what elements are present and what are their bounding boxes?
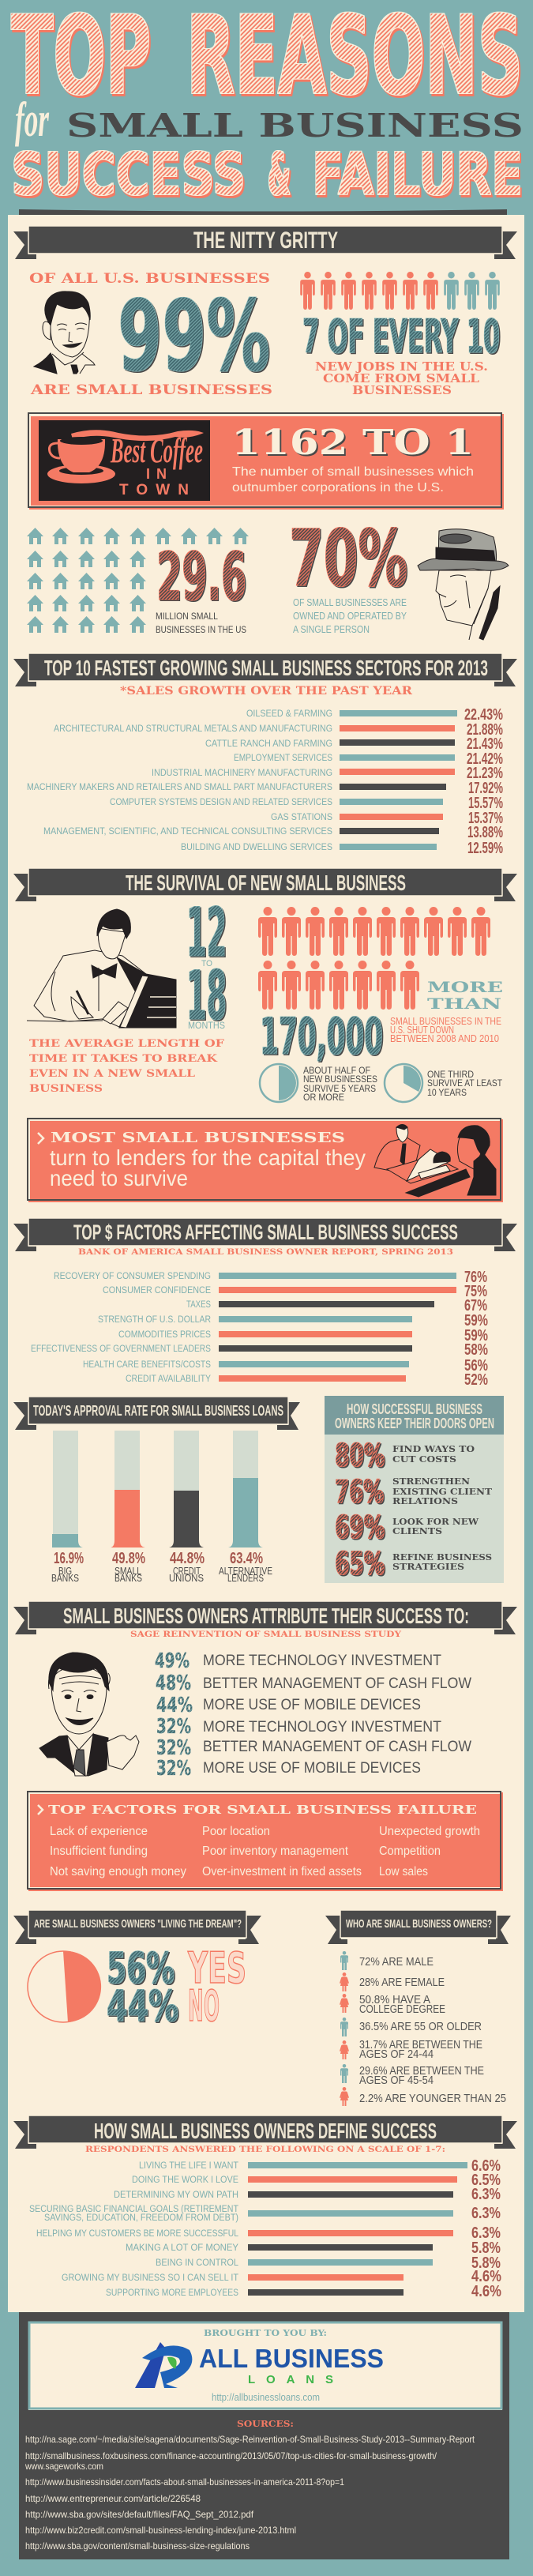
row: building and dwelling [181, 840, 503, 857]
row: sell it: GROWING MY BUSINESS SO I CAN SELL IT [62, 2273, 238, 2283]
row: strength of dollar [98, 1312, 488, 1329]
stat: 70 percent single owner [289, 513, 509, 640]
row: own path: 6.3% [471, 2186, 501, 2203]
row: oilseed and farming: 22.43% [464, 706, 503, 724]
row: 49 percent: 49% [155, 1649, 190, 1673]
row: college degree [340, 1994, 445, 2016]
row: taxes: TAXES [186, 1300, 211, 1310]
stat: 65 percent [335, 1546, 492, 1582]
row: ages 45-54: AGES OF 45-54 [359, 2074, 434, 2087]
banner: approval rate: TODAY'S APPROVAL RATE FOR SMALL BUSINESS LOANS [33, 1403, 283, 1419]
row: cattle ranch: CATTLE RANCH AND FARMING [205, 739, 332, 749]
stat: 65 percent: 65% [335, 1546, 385, 1582]
row: living the life: LIVING THE LIFE I WANT [139, 2161, 238, 2171]
stat: 65 percent: REFINE BUSINESS [392, 1551, 492, 1563]
failure factors list: Poor location [202, 1825, 270, 1838]
row: credit availability: CREDIT AVAILABILITY [126, 1374, 211, 1384]
sign: best coffee in town: Best Coffee [110, 431, 203, 470]
banner: approval rate [13, 1397, 300, 1430]
chart: living the dream [28, 1943, 246, 2031]
row: 55 or older [340, 2018, 482, 2036]
caption: half survive [303, 1065, 377, 1103]
row: sell it: 4.6% [471, 2268, 501, 2285]
words: more than [427, 979, 503, 1013]
row: 44 percent [156, 1694, 421, 1717]
illustration: man writing at desk [27, 909, 176, 1028]
row: industrial machinery [152, 765, 503, 782]
big text: 1162 to 1: 1162 TO 1 [231, 423, 474, 463]
value: 56 percent: 56% [107, 1943, 175, 1993]
caption: new jobs: COME FROM SMALL [323, 371, 479, 385]
caption: shut down: SMALL BUSINESSES IN THE [390, 1016, 501, 1027]
row: building and dwelling: BUILDING AND DWELLING SERVICES [181, 843, 332, 852]
source list: http://www.sba.gov/sites/default/files/FAQ_Sept_2012.pdf [25, 2509, 254, 2520]
title [11, 0, 524, 209]
row: 49 percent [155, 1649, 441, 1673]
illustration: man in hat [418, 529, 509, 640]
caption: owned and operated [293, 597, 407, 635]
column: alternative lenders: ALTERNATIVE [219, 1566, 272, 1577]
banner: top factors [13, 1218, 517, 1251]
stat: 69 percent: CLIENTS [392, 1525, 442, 1536]
row: living the life: 6.6% [471, 2157, 501, 2175]
caption: owned and operated: OF SMALL BUSINESSES ARE [293, 597, 407, 608]
row: money: MAKING A LOT OF MONEY [126, 2243, 238, 2253]
sign: best coffee in town: TOWN [119, 482, 189, 498]
banner: attribute their success [13, 1601, 517, 1634]
row: consumer spending: RECOVERY OF CONSUMER SPENDING [54, 1272, 211, 1281]
failure factors list [50, 1825, 480, 1878]
sign: best coffee in town: IN [146, 466, 167, 482]
row: 32 percent mobile: 32% [156, 1757, 191, 1781]
row: doing the work: DOING THE WORK I LOVE [132, 2175, 238, 2185]
logo: all business loans [135, 2342, 384, 2388]
row: consumer confidence: 75% [464, 1283, 487, 1300]
logo: all business loans: LOANS [248, 2373, 333, 2386]
row: 48 percent [156, 1672, 472, 1695]
column: credit unions: UNIONS [169, 1573, 204, 1584]
stat: 76 percent: EXISTING CLIENT [392, 1486, 492, 1497]
title line: top reasons [11, 0, 523, 119]
pie chart: one third survive 10 years [385, 1064, 422, 1102]
row: management consulting [43, 824, 503, 841]
row: employees: SUPPORTING MORE EMPLOYEES [106, 2288, 238, 2298]
source list: www.sageworks.com [24, 2461, 103, 2472]
row: male [340, 1951, 434, 1970]
text: 18 [186, 957, 227, 1036]
caption: million small businesses [156, 612, 246, 635]
row: 32 percent technology [156, 1715, 441, 1739]
row: employees: 4.6% [471, 2283, 501, 2300]
row: ages 24-44 [340, 2039, 482, 2061]
callout text: turn to lenders for the capital they [50, 1145, 366, 1170]
row: oilseed and farming [246, 706, 503, 724]
caption: owned and operated: OWNED AND OPERATED BY [293, 611, 407, 622]
title line: success and failure [11, 141, 523, 209]
row: 32 percent technology: 32% [156, 1715, 191, 1739]
row: gas stations [271, 810, 503, 827]
callout: top factors for failure [28, 1792, 503, 1891]
banner: living the dream [13, 1910, 261, 1944]
column: big banks: BANKS [51, 1573, 79, 1584]
pictogram: seventeen people [258, 907, 490, 1010]
row: ages 24-44: 31.7% ARE BETWEEN THE [359, 2039, 482, 2051]
big number: 99 percent: 99% [118, 280, 270, 393]
source list: http://na.sage.com/~/media/site/sagena/documents/Sage-Reinvention-of-Small-Business-Study-2013--Summary-Report [25, 2434, 475, 2445]
row: doing the work: 6.5% [471, 2172, 501, 2189]
callout frame [28, 1119, 503, 1202]
column: small banks: 49.8% [112, 1550, 145, 1567]
callout frame [28, 1792, 503, 1891]
row: consumer spending: 76% [464, 1269, 487, 1286]
row: gas stations: GAS STATIONS [271, 813, 332, 822]
stat: 80 percent [335, 1438, 475, 1474]
callout heading: MOST SMALL BUSINESSES [51, 1130, 345, 1146]
row: computer systems: COMPUTER SYSTEMS DESIGN AND RELATED SERVICES [110, 798, 332, 807]
caption: half survive: ABOUT HALF OF [303, 1065, 370, 1076]
callout: most small businesses [28, 1119, 503, 1202]
callout text: need to survive [50, 1166, 188, 1190]
row: 32 percent cash flow: BETTER MANAGEMENT OF CASH FLOW [203, 1738, 472, 1755]
callout description: The number of small businesses which [232, 465, 474, 479]
row: government leaders: EFFECTIVENESS OF GOVERNMENT LEADERS [31, 1344, 211, 1354]
label: yes: YES [187, 1943, 246, 1993]
column: credit unions: 44.8% [170, 1550, 205, 1567]
value: 44 percent: 44% [107, 1981, 178, 2031]
row: computer systems [110, 795, 503, 812]
failure factors list: Unexpected growth [379, 1825, 480, 1838]
script word: for: for [15, 93, 49, 147]
title line: success and failure: SUCCESS [11, 141, 246, 209]
sign: best coffee in town [39, 420, 210, 501]
source list: http://www.entrepreneur.com/article/226548 [25, 2493, 201, 2504]
stat: 76 percent: STRENGTHEN [392, 1476, 471, 1487]
row: female: 28% ARE FEMALE [359, 1976, 445, 1989]
row: younger than 25 [340, 2087, 506, 2106]
row: 44 percent: 44% [156, 1694, 193, 1717]
row: helping customers: HELPING MY CUSTOMERS BE MORE SUCCESSFUL [36, 2229, 239, 2239]
source list: http://www.businessinsider.com/facts-about-small-businesses-in-america-2011-8?op=1 [25, 2476, 344, 2488]
row: management consulting: MANAGEMENT, SCIENTIFIC, AND TECHNICAL CONSULTING SERVICES [43, 827, 332, 837]
row: credit availability [126, 1371, 488, 1389]
column: credit unions [169, 1431, 205, 1584]
row: ages 45-54: 29.6% ARE BETWEEN THE [359, 2065, 484, 2078]
column chart: approval rates [51, 1431, 272, 1584]
row: 48 percent: 48% [156, 1672, 191, 1695]
pie chart: 56 percent yes [28, 1951, 101, 2022]
column: small banks: BANKS [114, 1573, 142, 1584]
failure factors list: Lack of experience [50, 1825, 148, 1838]
row: computer systems: 15.57% [468, 795, 503, 812]
row: health care [83, 1357, 488, 1374]
callout frame [28, 413, 504, 510]
subheading: sales growth: *SALES GROWTH OVER THE PAST YEAR [120, 685, 412, 698]
stat: more than 170,000 shut down [258, 907, 503, 1103]
big number: 70 percent: 70% [289, 513, 407, 604]
failure factors list: Poor inventory management [202, 1845, 349, 1858]
row: male: 72% ARE MALE [359, 1956, 434, 1969]
stat: 69 percent: 69% [335, 1510, 385, 1546]
bar chart: fastest growing sectors [27, 706, 503, 857]
callout description [232, 465, 474, 495]
bar chart: top factors [31, 1269, 488, 1389]
row: government leaders: 58% [464, 1341, 488, 1359]
stat: break even time [27, 893, 227, 1095]
illustration: man giving thumbs up [39, 1653, 139, 1776]
pie chart: half survive 5 years [260, 1064, 298, 1102]
column: small banks [111, 1431, 145, 1584]
callout text [50, 1145, 366, 1190]
stat: 7 of every 10 new jobs [300, 272, 500, 397]
source list: http://www.sba.gov/content/small-business-size-regulations [25, 2540, 250, 2552]
failure factors list: Insufficient funding [50, 1845, 148, 1858]
caption: one third survive [427, 1069, 503, 1098]
row: helping customers: 6.3% [471, 2224, 501, 2242]
banner: survival of new small business [13, 868, 517, 901]
row: money: 5.8% [471, 2239, 501, 2257]
caption: half survive: SURVIVE 5 YEARS [303, 1083, 376, 1094]
row: consumer spending [54, 1269, 487, 1286]
row: oilseed and farming: OILSEED & FARMING [246, 709, 332, 719]
row: own path [114, 2186, 501, 2203]
row: employment services: EMPLOYMENT SERVICES [234, 754, 332, 763]
row: living the life [139, 2157, 501, 2175]
row: ages 45-54 [340, 2064, 484, 2087]
callout heading: TOP FACTORS FOR SMALL BUSINESS FAILURE [48, 1803, 477, 1817]
row: health care: 56% [464, 1357, 488, 1374]
caption: owned and operated: A SINGLE PERSON [293, 624, 370, 635]
panel: footer [19, 2312, 509, 2559]
big number: 170,000: 170,000 [260, 1008, 383, 1066]
row: 55 or older: 36.5% ARE 55 OR OLDER [359, 2021, 482, 2033]
banner: who are small business owners [325, 1910, 511, 1944]
column: big banks [51, 1431, 84, 1584]
row: 32 percent cash flow [156, 1736, 472, 1760]
title line: success and failure: & [268, 141, 291, 209]
list: who are small business owners [340, 1951, 506, 2106]
row: younger than 25: 2.2% ARE YOUNGER THAN 25 [359, 2093, 506, 2105]
word: months: MONTHS [188, 1020, 225, 1031]
row: 32 percent cash flow: 32% [156, 1736, 191, 1760]
row: strength of dollar: 59% [464, 1312, 488, 1329]
row: machinery makers: MACHINERY MAKERS AND RETAILERS AND SMALL PART MANUFACTURERS [27, 783, 332, 792]
row: taxes [186, 1297, 487, 1314]
row: financial goals: SAVINGS, EDUCATION, FREEDOM FROM DEBT) [44, 2213, 238, 2223]
stat: 80 percent: FIND WAYS TO [392, 1443, 475, 1454]
row: financial goals: SECURING BASIC FINANCIAL GOALS (RETIREMENT [29, 2205, 238, 2214]
row: ages 24-44: AGES OF 24-44 [359, 2048, 434, 2061]
stat: 76 percent: RELATIONS [392, 1495, 458, 1506]
panel body [325, 1435, 504, 1583]
banner: how owners define success [13, 2115, 517, 2149]
caption: new jobs: BUSINESSES [352, 383, 452, 397]
row: helping customers [36, 2224, 501, 2242]
stat: 69 percent [335, 1510, 479, 1546]
row: 48 percent: BETTER MANAGEMENT OF CASH FLOW [203, 1675, 472, 1692]
column: alternative lenders [219, 1431, 272, 1584]
stat: 99 percent of businesses [29, 271, 272, 398]
banner: the nitty gritty: THE NITTY GRITTY [193, 228, 338, 254]
link: website: http://allbusinessloans.com [212, 2392, 320, 2403]
row: college degree: 50.8% HAVE A [359, 1994, 430, 2006]
row: own path: DETERMINING MY OWN PATH [114, 2191, 238, 2200]
column: credit unions: CREDIT [173, 1566, 201, 1577]
row: 44 percent: MORE USE OF MOBILE DEVICES [203, 1696, 421, 1713]
row: cattle ranch: 21.43% [467, 735, 503, 753]
row: architectural metals: 21.88% [467, 721, 503, 739]
banner: living the dream: ARE SMALL BUSINESS OWNERS "LIVING THE DREAM"? [34, 1917, 242, 1931]
caption: million small businesses: BUSINESSES IN THE US [156, 626, 246, 635]
brought to you by box [28, 2322, 502, 2410]
row: taxes: 67% [464, 1297, 487, 1314]
row: employment services: 21.42% [467, 750, 503, 768]
bar chart: define success [29, 2157, 501, 2300]
chevron [38, 1805, 43, 1814]
caption: average length of time: TIME IT TAKES TO BREAK [29, 1053, 218, 1065]
row: financial goals [29, 2205, 501, 2223]
failure factors list: Competition [379, 1845, 441, 1858]
words: more than: MORE [427, 979, 503, 996]
column: big banks: 16.9% [54, 1550, 84, 1567]
caption: average length of time [29, 1038, 225, 1095]
main cream panel [8, 215, 524, 2312]
row: 32 percent mobile [156, 1757, 421, 1781]
row: 32 percent mobile: MORE USE OF MOBILE DEVICES [203, 1759, 421, 1777]
top band behind main panel [19, 209, 507, 216]
caption: shut down: U.S. SHUT DOWN [390, 1025, 454, 1036]
column: big banks: BIG [58, 1566, 72, 1577]
source list: http://www.biz2credit.com/small-business-lending-index/june-2013.html [25, 2525, 296, 2536]
caption: million small businesses: MILLION SMALL [156, 612, 219, 622]
row: health care: HEALTH CARE BENEFITS/COSTS [83, 1360, 211, 1370]
row: consumer confidence [103, 1283, 487, 1300]
row: machinery makers: 17.92% [468, 780, 503, 797]
title line: small business: SMALL BUSINESS [66, 107, 524, 145]
chevron [38, 1133, 43, 1144]
row: control [156, 2254, 501, 2272]
row: gas stations: 15.37% [468, 810, 503, 827]
row: industrial machinery: 21.23% [467, 765, 503, 782]
stat: 69 percent: LOOK FOR NEW [392, 1516, 479, 1527]
callout description: outnumber corporations in the U.S. [232, 481, 444, 495]
failure factors list: Low sales [379, 1865, 428, 1878]
caption: shut down: BETWEEN 2008 AND 2010 [390, 1033, 499, 1044]
logo: all business loans: ALL BUSINESS [199, 2344, 384, 2373]
caption: one third survive: ONE THIRD [427, 1069, 474, 1080]
panel header [325, 1396, 504, 1435]
caption: average length of time: THE AVERAGE LENGTH OF [29, 1038, 225, 1050]
row: architectural metals: ARCHITECTURAL AND STRUCTURAL METALS AND MANUFACTURING [54, 724, 332, 734]
column: alternative lenders: LENDERS [227, 1573, 264, 1584]
caption: are small businesses: ARE SMALL BUSINESSES [30, 382, 272, 398]
source list: http://smallbusiness.foxbusiness.com/finance-accounting/2013/05/07/top-us-cities-for-small-business-growth/ [25, 2450, 437, 2461]
row: machinery makers [27, 780, 503, 797]
caption: average length of time: BUSINESS [29, 1083, 103, 1095]
row: industrial machinery: INDUSTRIAL MACHINERY MANUFACTURING [152, 769, 332, 778]
pictogram: houses [27, 528, 249, 633]
row: consumer confidence: CONSUMER CONFIDENCE [103, 1286, 211, 1296]
panel: keep doors open [325, 1396, 504, 1583]
row: employment services [234, 750, 503, 768]
subheading: bank of america report: BANK OF AMERICA SMALL BUSINESS OWNER REPORT, SPRING 2013 [78, 1248, 453, 1257]
row: commodities prices [118, 1327, 488, 1344]
subheading: respondents scale: RESPONDENTS ANSWERED THE FOLLOWING ON A SCALE OF 1-7: [85, 2145, 445, 2154]
caption: new jobs [315, 359, 488, 397]
column: alternative lenders: 63.4% [230, 1550, 263, 1567]
caption: new jobs: NEW JOBS IN THE U.S. [315, 359, 488, 374]
column: small banks: SMALL [114, 1566, 141, 1577]
row: strength of dollar: STRENGTH OF U.S. DOLLAR [98, 1315, 211, 1325]
row: 32 percent technology: MORE TECHNOLOGY INVESTMENT [203, 1718, 441, 1736]
row: commodities prices: 59% [464, 1327, 488, 1344]
failure factors list: Not saving enough money [50, 1865, 186, 1878]
caption: shut down [390, 1016, 501, 1044]
row: money [126, 2239, 501, 2257]
stat: 76 percent [335, 1474, 492, 1510]
stat: 76 percent: 76% [335, 1474, 384, 1510]
row: credit availability: 52% [464, 1371, 488, 1389]
row: management consulting: 13.88% [467, 824, 503, 841]
text: 12 [186, 893, 227, 972]
word: to: TO [201, 959, 212, 968]
heading: sources: SOURCES: [237, 2419, 294, 2429]
row: 49 percent: MORE TECHNOLOGY INVESTMENT [203, 1652, 441, 1669]
footer background [19, 2312, 509, 2559]
row: architectural metals [54, 721, 503, 739]
banner: top 10 fastest growing sectors [13, 653, 517, 686]
callout: 1162 to 1 [28, 413, 504, 510]
row: government leaders [31, 1341, 488, 1359]
stat: 80 percent: 80% [335, 1438, 385, 1474]
stat: 29.6 million small businesses [27, 528, 249, 635]
row: cattle ranch [205, 735, 503, 753]
caption: average length of time: EVEN IN A NEW SMALL [29, 1068, 195, 1080]
banner: the nitty gritty [13, 226, 517, 259]
pictogram: ten people [300, 272, 500, 310]
heading: of all u.s. businesses: OF ALL U.S. BUSINESSES [29, 271, 270, 287]
source list [24, 2434, 475, 2552]
row: employees [106, 2283, 501, 2300]
label: brought to you by: BROUGHT TO YOU BY: [204, 2328, 327, 2338]
row: college degree: COLLEGE DEGREE [359, 2003, 445, 2016]
stat: 80 percent: CUT COSTS [392, 1453, 456, 1465]
failure factors list: Over-investment in fixed assets [202, 1865, 362, 1878]
list: success attribution [155, 1649, 472, 1781]
caption: half survive: NEW BUSINESSES [303, 1074, 377, 1085]
big number: 29.6: 29.6 [156, 538, 246, 615]
row: control: BEING IN CONTROL [156, 2258, 239, 2268]
subheading: sage study: SAGE REINVENTION OF SMALL BUSINESS STUDY [130, 1630, 402, 1639]
row: financial goals: 6.3% [471, 2205, 501, 2222]
row: building and dwelling: 12.59% [467, 840, 503, 857]
words: more than: THAN [427, 995, 501, 1013]
row: female [340, 1972, 445, 1991]
row: doing the work [132, 2172, 501, 2189]
illustration: loan meeting [374, 1125, 496, 1197]
stat: 65 percent: STRATEGIES [392, 1561, 464, 1572]
row: sell it [62, 2268, 501, 2285]
caption: half survive: OR MORE [303, 1092, 344, 1103]
illustration: smiling man [34, 291, 95, 374]
row: control: 5.8% [471, 2254, 501, 2272]
caption: one third survive: SURVIVE AT LEAST [427, 1077, 503, 1089]
chart: living the dream: NO [188, 1981, 220, 2031]
row: commodities prices: COMMODITIES PRICES [118, 1330, 211, 1340]
caption: one third survive: 10 YEARS [427, 1087, 467, 1098]
